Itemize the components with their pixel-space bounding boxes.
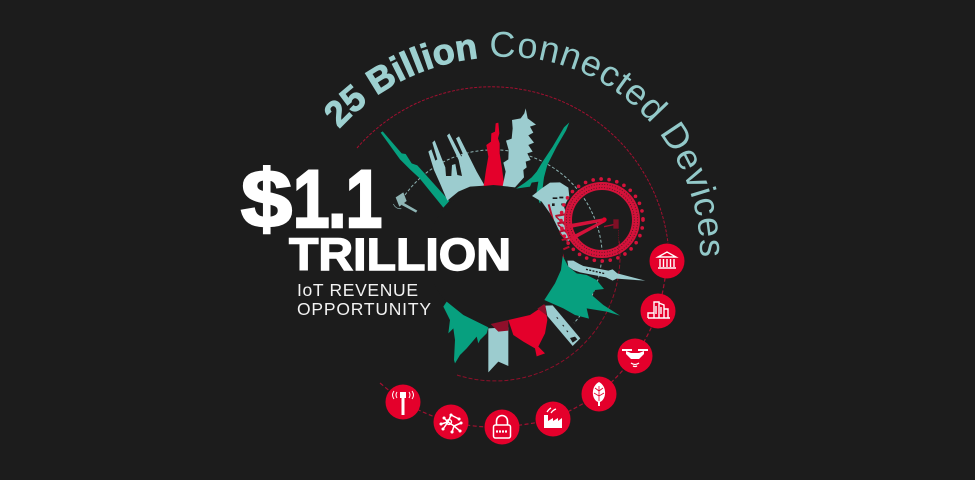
landmarks lower skyline xyxy=(443,256,645,372)
icon: network nodes xyxy=(434,404,468,440)
landmark: dark red overlap xyxy=(491,320,508,332)
landmark: green hills right xyxy=(544,256,620,319)
icon connector dashed line xyxy=(380,261,667,427)
outer red dashed arc xyxy=(357,87,668,243)
landmark: domed building xyxy=(532,182,577,242)
landmark: green hills left xyxy=(443,302,488,363)
icon: factory xyxy=(536,402,570,436)
curved heading: 25 Billion Connected Devices: 25 Billion Connected Devices xyxy=(324,32,720,256)
landmark: ribbon tower xyxy=(488,327,508,372)
headline: $1.1: $ xyxy=(241,154,292,245)
icon: antenna xyxy=(386,384,420,420)
landmark: Tokyo tower xyxy=(381,131,449,208)
landmark: light ruler tower xyxy=(545,305,580,346)
headline: TRILLION: TRILLION xyxy=(289,229,511,280)
subheading: OPPORTUNITY: OPPORTUNITY xyxy=(297,299,431,319)
icon: padlock xyxy=(484,410,520,444)
landmark: pagoda xyxy=(503,108,536,187)
landmark: cathedral xyxy=(428,133,485,201)
icon: bank xyxy=(650,244,684,278)
headline: $1.1 xyxy=(241,153,382,245)
landmark: red lattice bridge tower xyxy=(549,204,569,258)
icon: city buildings xyxy=(640,294,676,328)
landmark: Eiffel tower xyxy=(516,122,569,206)
icon: gavel xyxy=(393,192,417,213)
landmark: red peak xyxy=(508,305,547,356)
headline: $1.1: 1.1 xyxy=(293,153,382,245)
landmarks upper skyline xyxy=(381,108,643,261)
subheading: IoT REVENUE: IoT REVENUE xyxy=(297,280,418,300)
central dark disc xyxy=(427,186,563,322)
landmark: Shanghai pearl tower xyxy=(567,261,645,281)
landmark: Statue of Liberty xyxy=(484,123,504,186)
icon: drone xyxy=(618,338,652,374)
inner red dashed arc xyxy=(457,240,620,381)
grey dashed orbit xyxy=(405,150,602,323)
landmark: London Eye xyxy=(561,179,643,261)
icon: leaf xyxy=(582,376,616,412)
